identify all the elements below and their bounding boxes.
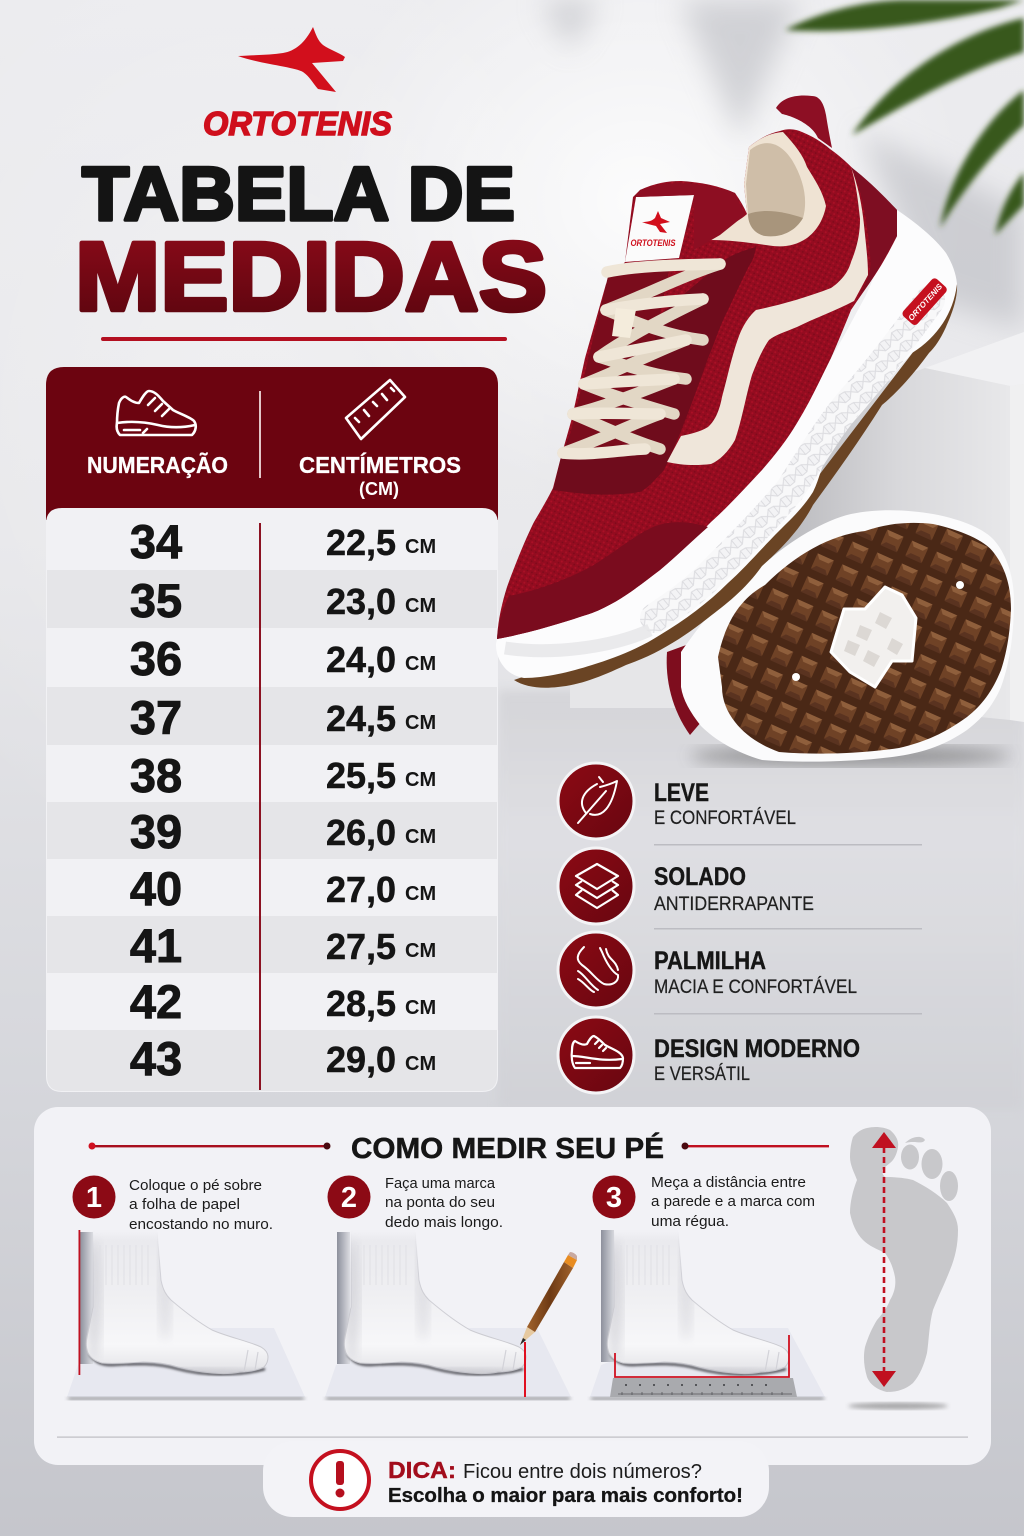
size numbers column: 42	[130, 975, 182, 1028]
size numbers column: 35	[130, 574, 182, 627]
tip text line 1	[388, 1457, 702, 1483]
step 3 text: a parede e a marca com	[651, 1193, 815, 1210]
centimetres column: 22,5	[326, 522, 396, 563]
sole white centre	[831, 587, 916, 687]
heading rule left	[88, 1142, 330, 1150]
heel tab	[776, 96, 832, 148]
step 1 text	[129, 1177, 273, 1233]
feature subtitle: E VERSÁTIL	[654, 1064, 750, 1085]
size table	[46, 367, 498, 1092]
centimetres column: 26,0	[326, 812, 396, 853]
background leaf shadows	[540, 0, 1024, 330]
centimetres column: CM	[405, 940, 436, 962]
centimetres column: 24,5	[326, 698, 396, 739]
centimetres column: CM	[405, 1053, 436, 1075]
centimetres column	[326, 522, 436, 1080]
tip text line 2: Escolha o maior para mais conforto!	[388, 1485, 743, 1507]
heel suede	[851, 167, 897, 295]
toe suede	[497, 522, 708, 639]
centimetres column: 29,0	[326, 1039, 396, 1080]
sneaker main	[496, 96, 957, 688]
tongue logo	[630, 211, 676, 249]
ruler	[610, 1378, 797, 1397]
size numbers column: 43	[130, 1032, 182, 1085]
centimetres column: 24,0	[326, 639, 396, 680]
lace loop	[612, 308, 636, 338]
centimetres column: CM	[405, 712, 436, 734]
header label: numeracao: NUMERAÇÃO	[87, 451, 228, 478]
step 3 number	[592, 1176, 636, 1218]
step 3	[590, 1174, 825, 1400]
icon: ruler	[346, 380, 405, 439]
table body	[46, 508, 498, 1092]
feature: solado	[558, 848, 814, 924]
centimetres column: CM	[405, 653, 436, 675]
white wave stripe	[667, 167, 868, 465]
centimetres column: CM	[405, 769, 436, 791]
title line 2: MEDIDAS	[75, 222, 547, 331]
size numbers column: 39	[130, 805, 182, 858]
features list	[558, 763, 922, 1093]
step 3 text	[651, 1174, 815, 1230]
step 1 text: encostando no muro.	[129, 1216, 273, 1233]
icon: layers	[558, 848, 634, 924]
step 3 illustration	[590, 1230, 825, 1400]
upper	[497, 129, 897, 639]
feature title: SOLADO	[654, 863, 746, 891]
title line 1: TABELA DE	[82, 152, 515, 237]
feature title: PALMILHA	[654, 947, 766, 975]
step 1 number: 1	[86, 1182, 102, 1214]
size numbers column: 36	[130, 632, 182, 685]
step 2 text	[385, 1175, 503, 1231]
feature subtitle: E CONFORTÁVEL	[654, 808, 796, 829]
feature subtitle: ANTIDERRAPANTE	[654, 894, 814, 915]
step 1	[67, 1176, 305, 1400]
feature: leve	[558, 763, 796, 839]
badge on midsole: ORTOTENIS	[907, 282, 945, 323]
dark lace gap	[566, 266, 670, 452]
eyestay suede	[553, 247, 756, 495]
midsole	[496, 210, 957, 678]
icon: insole	[558, 932, 634, 1008]
centimetres column: 25,5	[326, 755, 396, 796]
step 2 text: Faça uma marca	[385, 1175, 496, 1192]
logo star mark	[238, 27, 345, 92]
feature subtitle: MACIA E CONFORTÁVEL	[654, 977, 857, 998]
footprint shape	[850, 1127, 958, 1392]
step 1 text: Coloque o pé sobre	[129, 1177, 262, 1194]
centimetres column: CM	[405, 536, 436, 558]
title	[75, 152, 547, 341]
icon: alert	[311, 1451, 369, 1509]
step 3 number: 3	[606, 1182, 622, 1214]
centimetres column: CM	[405, 883, 436, 905]
midsole texture	[655, 300, 930, 618]
footprint diagram	[848, 1127, 958, 1410]
tip text line 1: Ficou entre dois números?	[463, 1461, 702, 1483]
step 1 illustration	[67, 1230, 305, 1400]
palm leaves	[785, 0, 1024, 235]
how to measure panel	[34, 1107, 991, 1465]
collar lining	[694, 132, 826, 250]
size numbers column: 40	[130, 862, 182, 915]
laces	[563, 264, 720, 454]
step 3 text: Meça a distância entre	[651, 1174, 806, 1191]
header label: centimetros: CENTÍMETROS	[299, 451, 461, 478]
centimetres column: 23,0	[326, 581, 396, 622]
logo	[203, 27, 392, 142]
badge on midsole	[901, 277, 948, 327]
tongue logo: ORTOTENIS	[630, 238, 676, 249]
size numbers column: 41	[130, 919, 182, 972]
step 2 text: dedo mais longo.	[385, 1214, 503, 1231]
panel heading: COMO MEDIR SEU PÉ	[351, 1131, 664, 1165]
step 1 number	[72, 1176, 116, 1218]
pencil	[520, 1252, 577, 1345]
header label: cm: (CM)	[359, 479, 399, 499]
centimetres column: 27,5	[326, 926, 396, 967]
step 2 number	[328, 1176, 370, 1218]
centimetres column: CM	[405, 997, 436, 1019]
logo wordmark: ORTOTENIS	[203, 105, 392, 142]
feature: design	[558, 1017, 860, 1093]
length arrow	[872, 1132, 896, 1387]
icon: feather	[558, 763, 634, 839]
icon: shoe	[117, 391, 196, 435]
step 2 illustration	[325, 1230, 577, 1400]
feature title: DESIGN MODERNO	[654, 1035, 860, 1063]
centimetres column: 28,5	[326, 983, 396, 1024]
sneaker sole (second shoe)	[667, 510, 1014, 766]
centimetres column: 27,0	[326, 869, 396, 910]
icon: sneaker	[558, 1017, 634, 1093]
display block	[570, 332, 1024, 722]
gum outsole	[514, 284, 957, 688]
feature title: LEVE	[654, 779, 709, 807]
feature: palmilha	[558, 932, 857, 1008]
centimetres column: CM	[405, 826, 436, 848]
centimetres column: CM	[405, 595, 436, 617]
size numbers column: 38	[130, 749, 182, 802]
size numbers column: 37	[130, 691, 182, 744]
tongue	[625, 195, 694, 262]
step 2 number: 2	[341, 1182, 357, 1214]
step 1 text: a folha de papel	[129, 1196, 240, 1213]
table header	[46, 367, 498, 520]
size numbers column: 34	[130, 515, 182, 568]
heading rule right	[682, 1142, 829, 1150]
step 2 text: na ponta do seu	[385, 1194, 495, 1211]
tip callout	[263, 1441, 769, 1517]
step 3 text: uma régua.	[651, 1213, 729, 1230]
step 2	[325, 1175, 577, 1400]
tip text line 1: DICA:	[388, 1457, 456, 1483]
size numbers column	[130, 515, 182, 1085]
